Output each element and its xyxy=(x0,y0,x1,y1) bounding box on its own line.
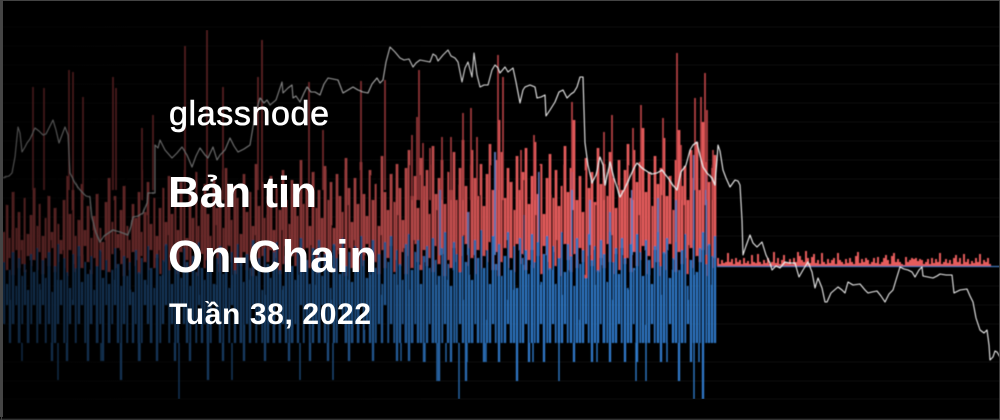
heading: Bản tin: Bản tin xyxy=(168,168,317,217)
blue bars: deep downward spikes xyxy=(22,343,699,399)
right series: small red bars xyxy=(717,251,991,266)
blue tint spikes rising into the red bars xyxy=(440,152,706,255)
red bars: main series xyxy=(4,120,715,278)
heading: On-Chain: On-Chain xyxy=(168,231,377,282)
red bars: tall spikes xyxy=(33,30,713,200)
logo: glassnode: glassnode xyxy=(169,95,329,133)
subheading: week and year: Tuần 38, 2022 xyxy=(169,298,371,331)
left frame band xyxy=(0,0,3,417)
price line xyxy=(3,47,1000,360)
right series: blue baseline xyxy=(717,266,1000,268)
blue bars xyxy=(4,230,715,399)
black irregular gaps between bars xyxy=(6,165,711,343)
